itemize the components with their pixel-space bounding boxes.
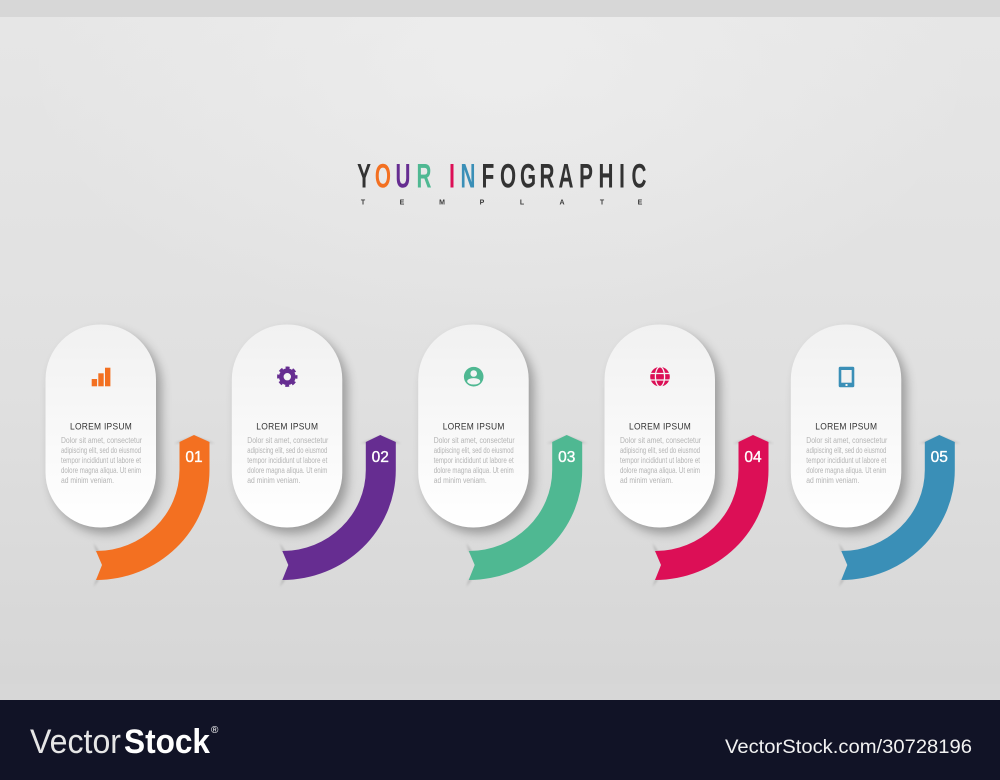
icon: tablet <box>839 367 854 387</box>
text block 04: Dolor sit amet, consectetur <box>620 435 701 445</box>
text block 03: ad minim veniam. <box>434 475 487 485</box>
text block 05: Dolor sit amet, consectetur <box>806 435 887 445</box>
text block 04: ad minim veniam. <box>620 475 673 485</box>
footer logo: Vector <box>30 723 121 761</box>
text block 05: dolore magna aliqua. Ut enim <box>806 465 886 475</box>
ribbon arrow 01 <box>94 435 215 587</box>
heading: your infographic: R <box>417 157 431 196</box>
icon: bar chart <box>92 368 110 386</box>
text block 02: Dolor sit amet, consectetur <box>247 435 328 445</box>
heading: your infographic: N <box>461 157 475 196</box>
ribbon arrow 04 <box>652 435 774 587</box>
text block 05: tempor incididunt ut labore et <box>806 455 887 465</box>
step 04 <box>604 324 774 587</box>
heading: your infographic: A <box>559 157 573 196</box>
text block 04: tempor incididunt ut labore et <box>620 455 700 465</box>
text block 02: tempor incididunt ut labore et <box>247 455 328 465</box>
ribbon arrow 02 <box>280 435 401 587</box>
text block 01: adipiscing elit, sed do eiusmod <box>61 445 141 455</box>
heading: your infographic <box>357 157 646 196</box>
text block 03 <box>434 422 515 485</box>
ribbon arrow 04: 04 <box>744 449 762 466</box>
step 05 <box>791 324 960 587</box>
heading: your infographic: F <box>482 157 494 196</box>
text block 03: tempor incididunt ut labore et <box>434 455 514 465</box>
text block 02: dolore magna aliqua. Ut enim <box>247 465 327 475</box>
card 03 <box>418 324 534 534</box>
icon: person <box>464 367 484 387</box>
footer logo: ® <box>211 725 219 736</box>
footer image id: VectorStock.com/30728196 <box>725 736 972 758</box>
text block 01: tempor incididunt ut labore et <box>61 455 141 465</box>
text block 02: adipiscing elit, sed do eiusmod <box>247 445 327 455</box>
heading: your infographic: H <box>599 157 613 196</box>
heading: your infographic: P <box>579 157 593 196</box>
text block 04: adipiscing elit, sed do eiusmod <box>620 445 700 455</box>
ribbon arrow 01: 01 <box>185 449 203 466</box>
text block 01: Dolor sit amet, consectetur <box>61 435 142 445</box>
step 02 <box>232 324 401 587</box>
heading: your infographic: I <box>449 157 455 196</box>
text block 05 <box>806 422 887 485</box>
heading: your infographic: R <box>540 157 554 196</box>
footer bar <box>0 700 1000 780</box>
subtitle: template: TEMPLATE <box>361 200 643 206</box>
heading: your infographic: U <box>396 157 410 196</box>
text block 01: LOREM IPSUM <box>70 422 132 432</box>
card 01 <box>46 324 162 534</box>
ribbon arrow 02: 02 <box>372 449 389 466</box>
heading: your infographic: O <box>375 157 391 196</box>
text block 03: LOREM IPSUM <box>443 422 505 432</box>
text block 02 <box>247 422 328 485</box>
text block 02: LOREM IPSUM <box>256 422 318 432</box>
icon: gear <box>278 368 296 386</box>
text block 03: Dolor sit amet, consectetur <box>434 435 515 445</box>
card 04 <box>604 324 720 534</box>
text block 04: LOREM IPSUM <box>629 422 691 432</box>
heading: your infographic: O <box>500 157 516 196</box>
text block 05: LOREM IPSUM <box>815 422 877 432</box>
text block 04 <box>620 422 701 485</box>
text block 02: ad minim veniam. <box>247 475 300 485</box>
footer logo <box>30 723 219 761</box>
ribbon arrow 05 <box>839 435 960 587</box>
heading: your infographic: Y <box>357 157 371 196</box>
heading: your infographic: C <box>632 157 646 196</box>
heading: your infographic: I <box>619 157 625 196</box>
heading: your infographic: G <box>520 157 536 196</box>
footer logo: Stock <box>124 723 211 761</box>
text block 04: dolore magna aliqua. Ut enim <box>620 465 700 475</box>
text block 01: ad minim veniam. <box>61 475 114 485</box>
ribbon arrow 05: 05 <box>931 449 948 466</box>
text block 03: dolore magna aliqua. Ut enim <box>434 465 514 475</box>
text block 05: ad minim veniam. <box>806 475 859 485</box>
text block 05: adipiscing elit, sed do eiusmod <box>806 445 886 455</box>
icon: globe <box>650 367 670 387</box>
text block 01: dolore magna aliqua. Ut enim <box>61 465 141 475</box>
title <box>357 157 646 206</box>
card 05 <box>791 324 907 534</box>
ribbon arrow 03 <box>466 435 588 587</box>
text block 01 <box>61 422 142 485</box>
ribbon arrow 03: 03 <box>558 449 575 466</box>
step 01 <box>46 324 215 587</box>
text block 03: adipiscing elit, sed do eiusmod <box>434 445 514 455</box>
card 02 <box>232 324 348 534</box>
step 03 <box>418 324 588 587</box>
